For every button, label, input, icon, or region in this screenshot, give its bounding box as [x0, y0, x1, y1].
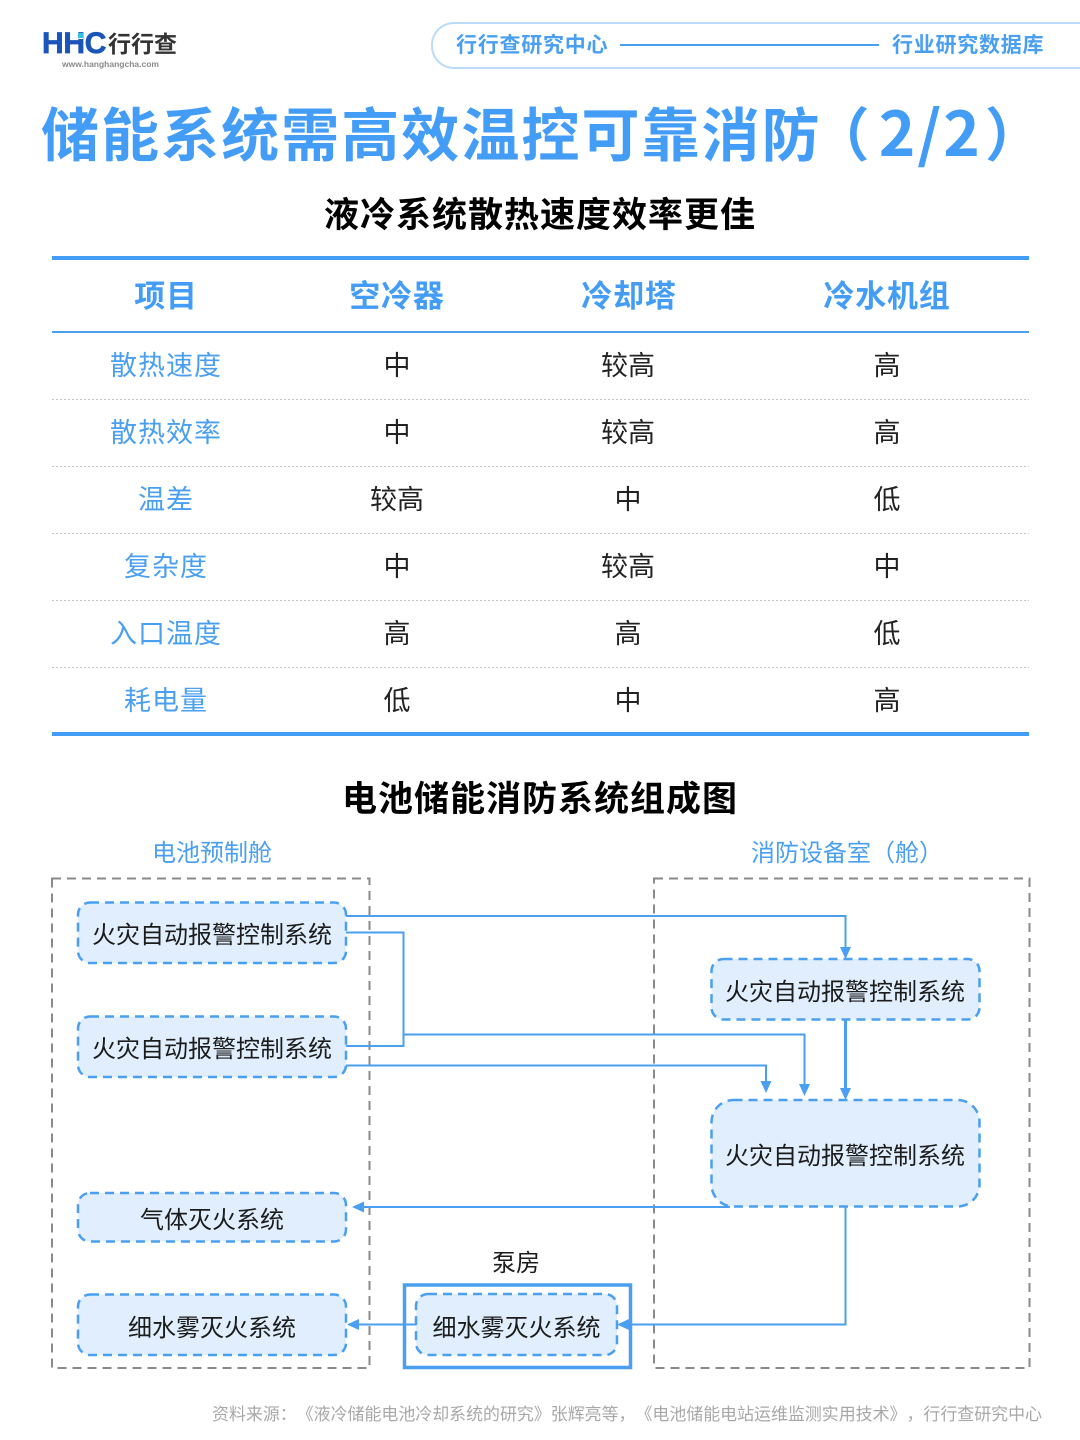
row: 散热速度: 较高 [601, 351, 655, 381]
text: box B: 火灾自动报警控制系统 [92, 1036, 332, 1063]
row: 散热速度: 散热速度 [110, 351, 222, 381]
row: 复杂度: 较高 [601, 552, 655, 582]
header divider line [620, 44, 879, 46]
row: 散热速度: 中 [384, 351, 410, 381]
row: 散热速度 [110, 351, 900, 381]
box: gas suppression [78, 1193, 346, 1242]
row: 入口温度: 高 [614, 619, 642, 649]
panel: battery cabin frame [52, 878, 370, 1368]
text: box A: 火灾自动报警控制系统 [92, 922, 332, 949]
box: alarm system B [78, 1016, 346, 1077]
table header: 冷却塔: 冷却塔 [581, 279, 677, 314]
row: 耗电量: 耗电量 [124, 686, 208, 716]
logo url: www.hanghangcha.com [62, 59, 159, 69]
table header: 冷水机组: 冷水机组 [823, 279, 951, 314]
source note: 资料来源：《液冷储能电池冷却系统的研究》张辉亮等，《电池储能电站运维监测实用技术》，行行查研究中心 [212, 1405, 1042, 1424]
label: pump room: 泵房 [492, 1250, 540, 1277]
heading: table: 液冷系统散热速度效率更佳 [324, 196, 756, 235]
row: 入口温度: 入口温度 [110, 619, 222, 649]
text: box C: 火灾自动报警控制系统 [725, 979, 965, 1006]
panel: comparison table [52, 256, 1029, 736]
row: 散热速度: 高 [874, 351, 900, 381]
table header: 空冷器: 空冷器 [349, 279, 445, 314]
row: 入口温度: 高 [384, 619, 410, 649]
row: 耗电量: 高 [874, 686, 900, 716]
row: 耗电量: 中 [614, 686, 642, 716]
header right text: 行业研究数据库 [892, 34, 1044, 57]
table header: 项目: 项目 [134, 279, 198, 314]
row: 散热效率: 中 [384, 418, 410, 448]
text: box D: 火灾自动报警控制系统 [725, 1143, 965, 1170]
row: 温差: 中 [614, 485, 642, 515]
logo [42, 27, 177, 69]
arrow: D to pump mist [617, 1207, 846, 1330]
arrow: C to D [840, 1020, 851, 1100]
label: 电池预制舱: 电池预制舱 [152, 840, 272, 867]
arrow: bus to D [404, 1034, 810, 1096]
row: 散热效率: 散热效率 [110, 418, 222, 448]
row: 耗电量 [124, 686, 900, 716]
header pill [431, 22, 1080, 69]
row: 温差: 低 [874, 485, 900, 515]
panel: fire equipment room frame [654, 878, 1030, 1368]
arrow: pump mist to left mist [347, 1319, 416, 1330]
logo mark: HHC: HHC [42, 27, 106, 60]
row: 复杂度: 中 [874, 552, 900, 582]
row: 复杂度 [124, 552, 900, 582]
box: water mist pump [416, 1294, 617, 1355]
label: 消防设备室: 消防设备室（舱） [751, 840, 943, 867]
title: 储能系统需高效温控可靠消防（2/2） [41, 84, 1045, 174]
row: 散热效率: 高 [874, 418, 900, 448]
arrow: D to gas suppression [352, 1202, 730, 1212]
row: 入口温度: 低 [874, 619, 900, 649]
row: 复杂度: 复杂度 [124, 552, 208, 582]
panel: pump room frame [404, 1285, 630, 1368]
text: water mist left: 细水雾灭火系统 [128, 1315, 296, 1342]
table rules [52, 256, 1029, 736]
box: alarm system D [712, 1100, 980, 1206]
row: 入口温度 [110, 619, 900, 649]
header left text: 行行查研究中心 [456, 34, 608, 57]
row: 温差 [138, 485, 900, 515]
text: water mist pump: 细水雾灭火系统 [432, 1315, 600, 1342]
row: 耗电量: 低 [384, 686, 410, 716]
arrow: B to D [346, 1066, 772, 1093]
arrow: A to C [346, 916, 851, 959]
row: 散热效率 [110, 418, 900, 448]
box: alarm system C [712, 959, 980, 1020]
box: water mist left [78, 1294, 346, 1355]
row: 温差: 温差 [138, 485, 194, 515]
logo wordmark: 行行查 [108, 31, 177, 57]
heading: diagram: 电池储能消防系统组成图 [342, 780, 738, 819]
logo dot [78, 33, 83, 39]
text: gas suppression: 气体灭火系统 [140, 1207, 284, 1234]
connector: A to B bus [346, 932, 404, 1046]
box: alarm system A [78, 902, 346, 963]
row: 复杂度: 中 [384, 552, 410, 582]
row: 散热效率: 较高 [601, 418, 655, 448]
row: 温差: 较高 [370, 485, 424, 515]
